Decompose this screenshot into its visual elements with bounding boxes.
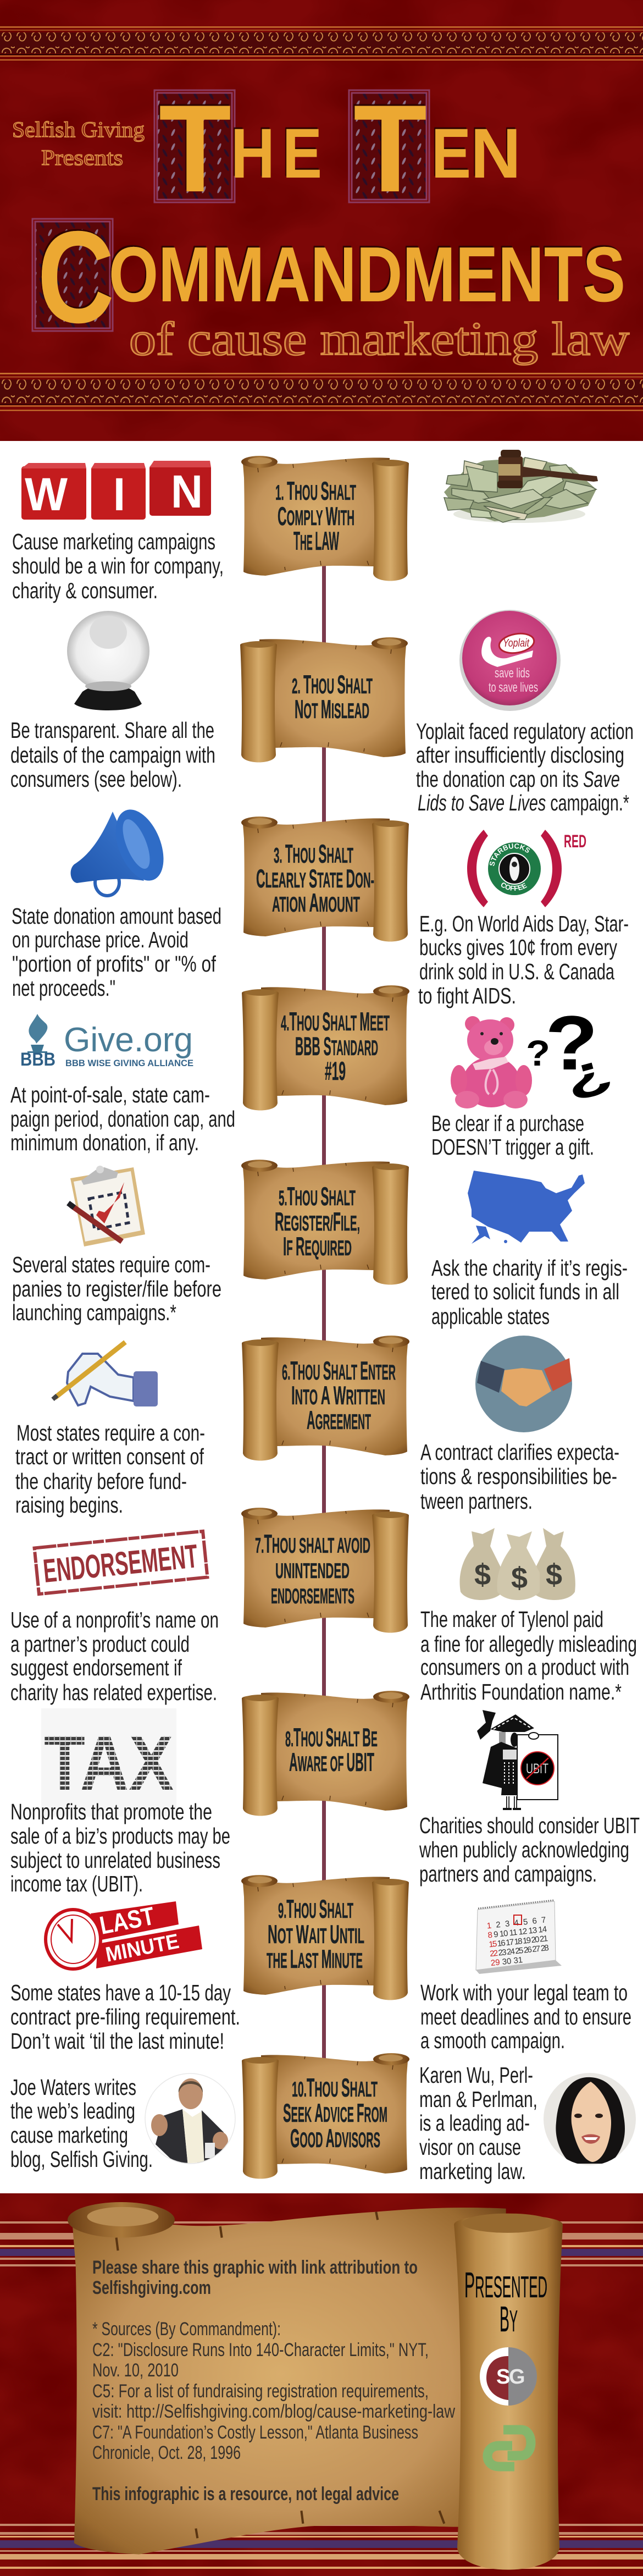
text: contract left: tract or written consent of <box>15 1444 204 1469</box>
text: point of sale: minimum donation, if any. <box>10 1130 199 1155</box>
scroll 4: 4.THOU SHALT MEET <box>281 1007 390 1036</box>
scroll 2 <box>240 637 408 762</box>
icon: Starbucks RED: STARBUCKS <box>489 843 530 867</box>
scroll 3: 3. THOU SHALT <box>274 839 353 868</box>
icon: BBB Give.org logo <box>20 1014 193 1070</box>
footer text: C2: "Disclosure Runs Into 140-Character Limits," NYT, <box>92 2340 429 2360</box>
text: endorsement: a partner’s product could <box>10 1631 190 1657</box>
scroll 4: #19 <box>325 1056 346 1085</box>
icon: Yoplait lid <box>459 610 561 711</box>
scroll 9: 9.THOU SHALT <box>278 1894 353 1923</box>
text: UBIT left: Nonprofits that promote the <box>10 1799 212 1824</box>
text: donation amount: on purchase price. Avoid <box>12 927 189 952</box>
icon: pink teddy and question marks: ? <box>560 1049 618 1111</box>
icon: desk calendar: 8 9 10 11 12 13 14 <box>487 1924 547 1940</box>
text: purchase: Be clear if a purchase <box>431 1111 584 1136</box>
icon: Yoplait lid: Yoplait <box>503 637 530 649</box>
icon: TAX word cloud: TAX <box>44 1719 174 1807</box>
icon: last minute stamp: MINUTE <box>104 1930 181 1967</box>
footer text: Please share this graphic with link attribution to <box>92 2257 418 2278</box>
text: Starbucks <box>418 911 629 1008</box>
text: win: Cause marketing campaigns <box>12 529 215 554</box>
text: Karen Wu: visor on cause <box>419 2134 521 2160</box>
footer text: Nov. 10, 2010 <box>92 2360 179 2381</box>
text: UBIT left: sale of a biz’s products may be <box>10 1823 230 1849</box>
scroll 1: COMPLY WITH <box>278 501 354 531</box>
scroll 2: 2. THOU SHALT <box>292 670 373 699</box>
presented by: BY <box>500 2299 518 2339</box>
text: Karen Wu <box>419 2062 537 2184</box>
text: donation amount: "portion of profits" or "% of <box>12 951 216 977</box>
scroll 6 <box>242 1336 409 1460</box>
text: transparency: details of the campaign with <box>10 742 215 768</box>
icon: money bags: $ <box>546 1558 562 1591</box>
scroll 7: UNINTENDED <box>275 1559 350 1583</box>
presenter line: Selfish Giving <box>12 117 145 142</box>
scroll 5: 5.THOU SHALT <box>279 1182 356 1211</box>
footer text: * Sources (By Commandment): <box>92 2319 281 2340</box>
text: endorsement: suggest endorsement if <box>10 1655 182 1680</box>
title: The Ten Commandments: E <box>431 114 471 193</box>
scroll 9 <box>241 1875 409 2000</box>
icon: last minute stamp <box>46 1901 202 1969</box>
icon: desk calendar: 29 30 31 <box>490 1955 523 1968</box>
text: UBIT left: income tax (UBIT). <box>10 1871 143 1896</box>
text: Starbucks: to fight AIDS. <box>418 983 516 1008</box>
scroll 5 <box>241 1160 409 1284</box>
icon: desk calendar <box>476 1900 562 1974</box>
title: The Ten Commandments <box>37 79 625 350</box>
text: Karen Wu: man & Perlman, <box>419 2087 537 2112</box>
text: point of sale <box>10 1082 235 1155</box>
bottom ornamental border <box>0 373 643 411</box>
scroll 5: IF REQUIRED <box>283 1232 352 1261</box>
text: Joe Waters: the web’s leading <box>10 2098 135 2123</box>
text: win <box>12 529 224 603</box>
scroll 1: THE LAW <box>293 526 339 555</box>
timeline line <box>322 550 326 2059</box>
scroll 9: NOT WAIT UNTIL <box>268 1919 364 1949</box>
text: contract left <box>15 1420 205 1518</box>
presenter line: Presents <box>41 145 123 170</box>
scroll 5: REGISTER/FILE, <box>275 1207 360 1236</box>
text: endorsement: Use of a nonprofit’s name on <box>10 1607 219 1632</box>
icon: town crier with UBIT sign <box>477 1710 558 1809</box>
icon: town crier with UBIT sign: UBIT <box>526 1761 548 1777</box>
text: Joe Waters: blog, Selfish Giving. <box>10 2147 153 2172</box>
icon: BBB Give.org logo: BBB WISE GIVING ALLIANCE <box>65 1058 193 1068</box>
text: win: charity & consumer. <box>12 578 158 603</box>
text: states require: Several states require com- <box>12 1252 210 1277</box>
logo: Perlman and Perlman <box>487 2430 531 2467</box>
text: Karen Wu: Karen Wu, Perl- <box>419 2062 533 2088</box>
footer panel <box>0 2193 643 2576</box>
scroll 2: NOT MISLEAD <box>295 694 369 724</box>
icon: US map <box>468 1171 585 1244</box>
text: point of sale: At point-of-sale, state cam- <box>10 1082 210 1107</box>
scroll 6: 6.THOU SHALT ENTER <box>282 1356 396 1385</box>
text: donation amount: State donation amount based <box>12 903 221 929</box>
text: purchase <box>431 1111 594 1160</box>
text: last minute: Some states have a 10-15 day <box>10 1980 231 2005</box>
logo: Selfish Giving <box>480 2347 537 2406</box>
icon: Yoplait lid: to save lives <box>489 680 538 695</box>
scroll 4: BBB STANDARD <box>295 1031 378 1061</box>
text: states require: launching campaigns.* <box>12 1300 176 1325</box>
text: ask the charity <box>431 1255 628 1329</box>
text: last minute: contract pre-filing requirement. <box>10 2004 240 2029</box>
text: donation amount: net proceeds." <box>12 975 115 1001</box>
icon: gavel on money pile <box>444 450 598 523</box>
letter panel: second T <box>349 90 429 202</box>
icon: Yoplait lid: save lids <box>495 666 530 681</box>
title: The Ten Commandments: H <box>231 114 275 193</box>
text: transparency: Be transparent. Share all the <box>10 718 214 743</box>
title: The Ten Commandments: N <box>470 114 521 193</box>
text: UBIT right <box>419 1813 640 1887</box>
title: The Ten Commandments: C <box>37 205 114 350</box>
icon: pink teddy and question marks: ? <box>526 1033 550 1073</box>
text: Yoplait: the donation cap on its Save <box>416 766 620 792</box>
icon: hand writing <box>53 1342 158 1406</box>
footer panel: PRESENTED <box>464 2265 547 2305</box>
text: contract right <box>420 1439 619 1514</box>
scroll 6: INTO A WRITTEN <box>291 1381 385 1410</box>
text: transparency: consumers (see below). <box>10 766 182 792</box>
text: UBIT left: subject to unrelated business <box>10 1847 220 1873</box>
text: contract right: tween partners. <box>420 1488 533 1514</box>
text: Yoplait <box>416 719 634 815</box>
scroll 10: 10.THOU SHALT <box>292 2073 378 2102</box>
icon: money bags <box>460 1528 575 1600</box>
logo: Selfish Giving: G <box>509 2365 525 2389</box>
scroll 3 <box>241 817 409 941</box>
icon: desk calendar: 22 23 24 25 26 27 28 <box>489 1943 550 1959</box>
icon: Starbucks RED <box>467 830 586 907</box>
icon: handshake <box>475 1336 572 1432</box>
text: ask the charity: applicable states <box>431 1304 550 1329</box>
footer text: C7: "A Foundation’s Costly Lesson," Atlanta Business <box>92 2422 418 2443</box>
text: states require: panies to register/file before <box>12 1276 221 1301</box>
text: Joe Waters: cause marketing <box>10 2122 128 2148</box>
scroll 7: ENDORSEMENTS <box>271 1585 354 1608</box>
text: UBIT left <box>10 1799 230 1896</box>
icon: desk calendar: 1 2 3 4 5 6 7 <box>486 1915 546 1931</box>
scroll 8: 8.THOU SHALT BE <box>285 1723 378 1752</box>
footer text: Chronicle, Oct. 28, 1996 <box>92 2442 241 2463</box>
scroll 10: GOOD ADVISORS <box>290 2123 380 2153</box>
icon: money bags: $ <box>474 1558 491 1591</box>
text: endorsement: charity has related expertise. <box>10 1680 217 1705</box>
scroll 3: CLEARLY STATE DON- <box>256 864 374 893</box>
icon: WIN blocks: I <box>113 468 125 520</box>
footer text: Selfishgiving.com <box>92 2277 211 2298</box>
footer text: This infographic is a resource, not legal advice <box>92 2484 399 2505</box>
text: Tylenol <box>420 1607 637 1705</box>
icon: megaphone <box>71 803 173 896</box>
scroll 1 <box>241 456 409 581</box>
title: The Ten Commandments: E <box>282 114 322 193</box>
text: transparency <box>10 718 215 792</box>
text: donation amount <box>12 903 221 1001</box>
icon: Starbucks RED: COFFEE <box>501 882 527 891</box>
icon: endorsement stamp <box>35 1531 207 1594</box>
footer band: top <box>0 2221 643 2266</box>
footer band: bottom <box>0 2524 643 2569</box>
footer text <box>92 2257 455 2505</box>
scroll 6: AGREEMENT <box>307 1405 371 1435</box>
text: contract left: the charity before fund- <box>15 1469 187 1494</box>
icon: pink teddy and question marks: ? <box>545 1000 598 1086</box>
text: win: should be a win for company, <box>12 553 224 578</box>
portrait: Karen Wu <box>544 2073 636 2165</box>
title: The Ten Commandments: T <box>159 79 231 218</box>
logo: Selfish Giving: S <box>496 2365 510 2389</box>
scroll 9: THE LAST MINUTE <box>267 1944 363 1973</box>
scroll 8 <box>242 1691 409 1816</box>
icon: WIN blocks <box>21 461 211 520</box>
letter panel: C <box>32 219 113 331</box>
presenter line <box>12 117 145 170</box>
scroll 3: ATION AMOUNT <box>272 888 360 917</box>
text: contract left: raising begins. <box>15 1492 123 1518</box>
text: last minute <box>10 1980 240 2054</box>
text: legal team <box>420 1980 631 2053</box>
letter panel: first T <box>154 90 235 202</box>
text: Karen Wu: marketing law. <box>419 2159 526 2184</box>
text: last minute: Don’t wait ‘til the last minute! <box>10 2028 224 2054</box>
scroll 7: 7.THOU SHALT AVOID <box>255 1529 370 1558</box>
icon: desk calendar: 15 16 17 18 19 20 21 <box>489 1934 548 1949</box>
scroll 10: SEEK ADVICE FROM <box>283 2098 387 2127</box>
icon: pink teddy and question marks <box>451 1000 618 1111</box>
scroll 8: AWARE OF UBIT <box>289 1747 374 1777</box>
icon: BBB Give.org logo: BBB <box>20 1049 56 1070</box>
text: states require <box>12 1252 221 1325</box>
icon: endorsement stamp: ENDORSEMENT <box>42 1537 199 1590</box>
presented by <box>464 2265 547 2339</box>
scroll 4 <box>242 985 409 1111</box>
text: Joe Waters <box>10 2075 153 2172</box>
icon: Starbucks RED: RED <box>564 831 586 851</box>
header panel <box>0 0 643 441</box>
icon: last minute stamp: LAST <box>97 1901 157 1940</box>
text: Joe Waters: Joe Waters writes <box>10 2075 136 2100</box>
scroll 1: 1. THOU SHALT <box>275 476 356 505</box>
title: The Ten Commandments: T <box>353 79 427 218</box>
subtitle: of cause marketing law <box>129 312 629 365</box>
icon: BBB Give.org logo: Give.org <box>64 1021 193 1059</box>
scroll 10 <box>242 2053 409 2178</box>
top ornamental border <box>0 26 643 60</box>
portrait: Joe Waters <box>145 2073 235 2166</box>
footer text: C5: For a list of fundraising registration requirements, <box>92 2381 429 2402</box>
footer scroll <box>68 2202 563 2570</box>
icon: WIN blocks: W <box>25 468 68 520</box>
text: point of sale: paign period, donation cap, and <box>10 1106 235 1132</box>
icon: money bags: $ <box>511 1562 528 1595</box>
text: legal team: a smooth campaign. <box>420 2028 565 2053</box>
scroll 7 <box>241 1508 409 1633</box>
icon: WIN blocks: N <box>171 466 203 517</box>
text: endorsement <box>10 1607 219 1705</box>
icon: clipboard with pencil <box>68 1166 145 1246</box>
text: Karen Wu: is a leading ad- <box>419 2110 530 2136</box>
text: contract left: Most states require a con- <box>16 1420 205 1446</box>
icon: crystal ball <box>67 611 149 710</box>
footer text: visit: http://Selfishgiving.com/blog/cause-marketing-law <box>92 2401 455 2422</box>
